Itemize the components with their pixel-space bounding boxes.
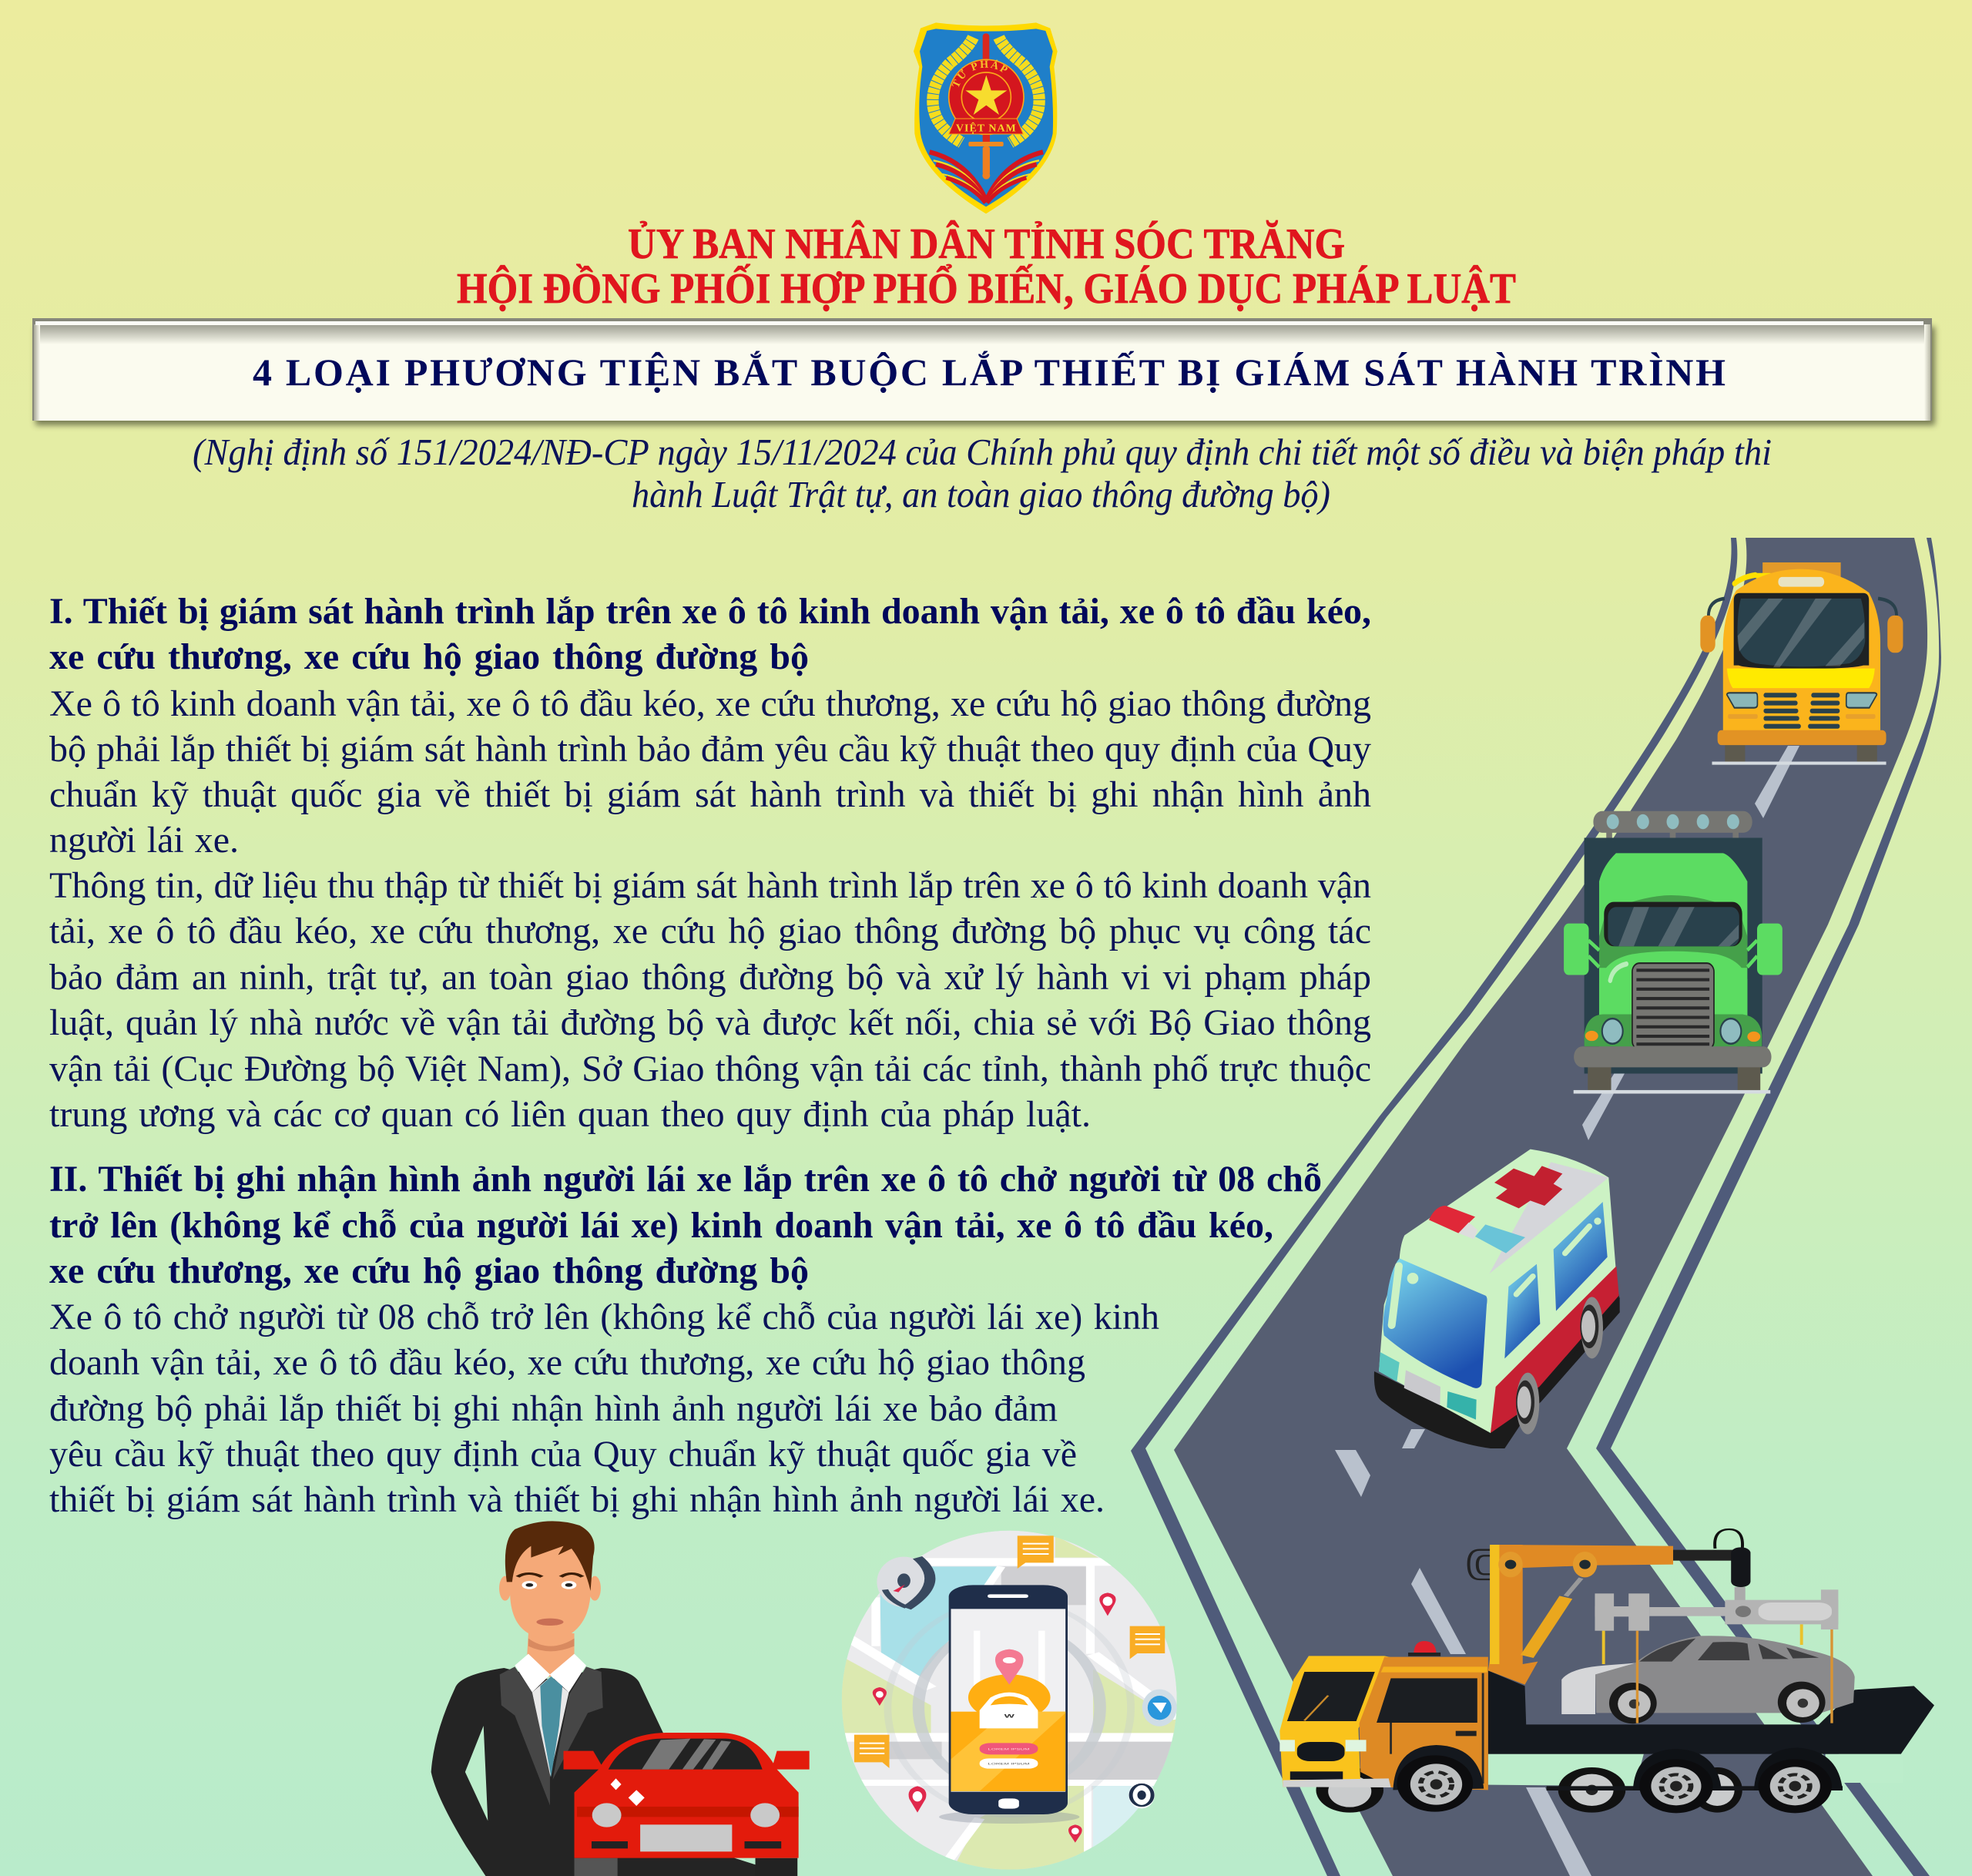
section II heading bbox=[49, 1159, 1322, 1291]
section I paragraph 2: Thông tin, dữ liệu thu thập từ thiết bị giám sát hành trình lắp trên xe ô tô kinh doanh vận bbox=[49, 865, 1371, 906]
section I paragraph 1: người lái xe. bbox=[49, 820, 239, 861]
section I paragraph 1: Xe ô tô kinh doanh vận tải, xe ô tô đầu kéo, xe cứu thương, xe cứu hộ giao thông đường bbox=[49, 683, 1371, 724]
logo emblem: TƯ PHÁP bbox=[952, 60, 1008, 87]
section II paragraph: đường bộ phải lắp thiết bị ghi nhận hình ảnh người lái xe bảo đảm bbox=[49, 1388, 1058, 1429]
vehicle: green truck bbox=[1564, 811, 1783, 1094]
section I paragraph 2: bảo đảm an ninh, trật tự, an toàn giao thông đường bộ và xử lý hành vi vi phạm pháp bbox=[49, 957, 1371, 998]
map background bbox=[839, 1531, 1179, 1870]
illustration: phone on city map bbox=[839, 1531, 1179, 1870]
section I paragraph 2 bbox=[49, 865, 1371, 1135]
illustration: red car bbox=[563, 1733, 810, 1876]
section II heading: trở lên (không kể chỗ của người lái xe) kinh doanh vận tải, xe ô tô đầu kéo, bbox=[49, 1205, 1273, 1245]
subtitle: legal reference: (Nghị định số 151/2024/NĐ-CP ngày 15/11/2024 của Chính phủ quy định chi tiết một số điều và biện pháp thi bbox=[193, 431, 1772, 473]
section I heading: xe cứu thương, xe cứu hộ giao thông đường bộ bbox=[49, 636, 809, 677]
section I paragraph 2: luật, quản lý nhà nước về vận tải đường bộ và được kết nối, chia sẻ với Bộ Giao thông bbox=[49, 1002, 1371, 1043]
logo emblem: VIỆT NAM bbox=[956, 122, 1017, 135]
phone device: LOREM IPSUM bbox=[988, 1763, 1030, 1766]
subtitle: legal reference: hành Luật Trật tự, an toàn giao thông đường bộ) bbox=[632, 473, 1330, 515]
heading: issuing authority: HỘI ĐỒNG PHỐI HỢP PHỔ BIẾN, GIÁO DỤC PHÁP LUẬT bbox=[457, 263, 1516, 313]
logo emblem bbox=[914, 22, 1058, 214]
subtitle: legal reference bbox=[193, 431, 1772, 515]
section II paragraph: thiết bị giám sát hành trình và thiết bị ghi nhận hình ảnh người lái xe. bbox=[49, 1479, 1105, 1520]
section I paragraph 1 bbox=[49, 683, 1371, 861]
section II paragraph: Xe ô tô chở người từ 08 chỗ trở lên (không kể chỗ của người lái xe) kinh bbox=[49, 1297, 1159, 1337]
vehicle: ambulance bbox=[1374, 1149, 1620, 1448]
heading: issuing authority bbox=[457, 220, 1516, 313]
section I paragraph 2: tải, xe ô tô đầu kéo, xe cứu thương, xe cứu hộ giao thông đường bộ phục vụ công tác bbox=[49, 911, 1371, 951]
heading: issuing authority: ỦY BAN NHÂN DÂN TỈNH SÓC TRĂNG bbox=[628, 220, 1345, 268]
section II paragraph bbox=[49, 1297, 1159, 1520]
section I paragraph 2: trung ương và các cơ quan có liên quan theo quy định của pháp luật. bbox=[49, 1094, 1091, 1135]
section II paragraph: doanh vận tải, xe ô tô đầu kéo, xe cứu thương, xe cứu hộ giao thông bbox=[49, 1342, 1085, 1383]
section I paragraph 2: vận tải (Cục Đường bộ Việt Nam), Sở Giao thông vận tải các tỉnh, thành phố trực thuộc bbox=[49, 1049, 1371, 1089]
section II paragraph: yêu cầu kỹ thuật theo quy định của Quy chuẩn kỹ thuật quốc gia về bbox=[49, 1434, 1077, 1475]
title banner bbox=[32, 318, 1935, 425]
vehicle: yellow bus bbox=[1700, 562, 1903, 765]
winding road bbox=[1131, 538, 1941, 1876]
phone device: LOREM IPSUM bbox=[988, 1748, 1030, 1751]
section II heading: II. Thiết bị ghi nhận hình ảnh người lái xe lắp trên xe ô tô chở người từ 08 chỗ bbox=[49, 1159, 1322, 1200]
phone device bbox=[939, 1585, 1079, 1824]
section II heading: xe cứu thương, xe cứu hộ giao thông đường bộ bbox=[49, 1250, 809, 1291]
vehicle: tow truck carrying car bbox=[1279, 1529, 1934, 1813]
section I paragraph 1: bộ phải lắp thiết bị giám sát hành trình bảo đảm yêu cầu kỹ thuật theo quy định của Quy bbox=[49, 729, 1371, 770]
phone device: W bbox=[1004, 1713, 1015, 1719]
section I heading: I. Thiết bị giám sát hành trình lắp trên xe ô tô kinh doanh vận tải, xe ô tô đầu kéo, bbox=[49, 591, 1371, 632]
section I heading bbox=[49, 591, 1371, 677]
illustration: businessman bbox=[431, 1521, 801, 1876]
section I paragraph 1: chuẩn kỹ thuật quốc gia về thiết bị giám sát hành trình và thiết bị ghi nhận hình ảnh bbox=[49, 774, 1371, 815]
map pins and chat bubbles bbox=[854, 1535, 1177, 1843]
title banner: 4 LOẠI PHƯƠNG TIỆN BẮT BUỘC LẮP THIẾT BỊ GIÁM SÁT HÀNH TRÌNH bbox=[253, 350, 1726, 394]
